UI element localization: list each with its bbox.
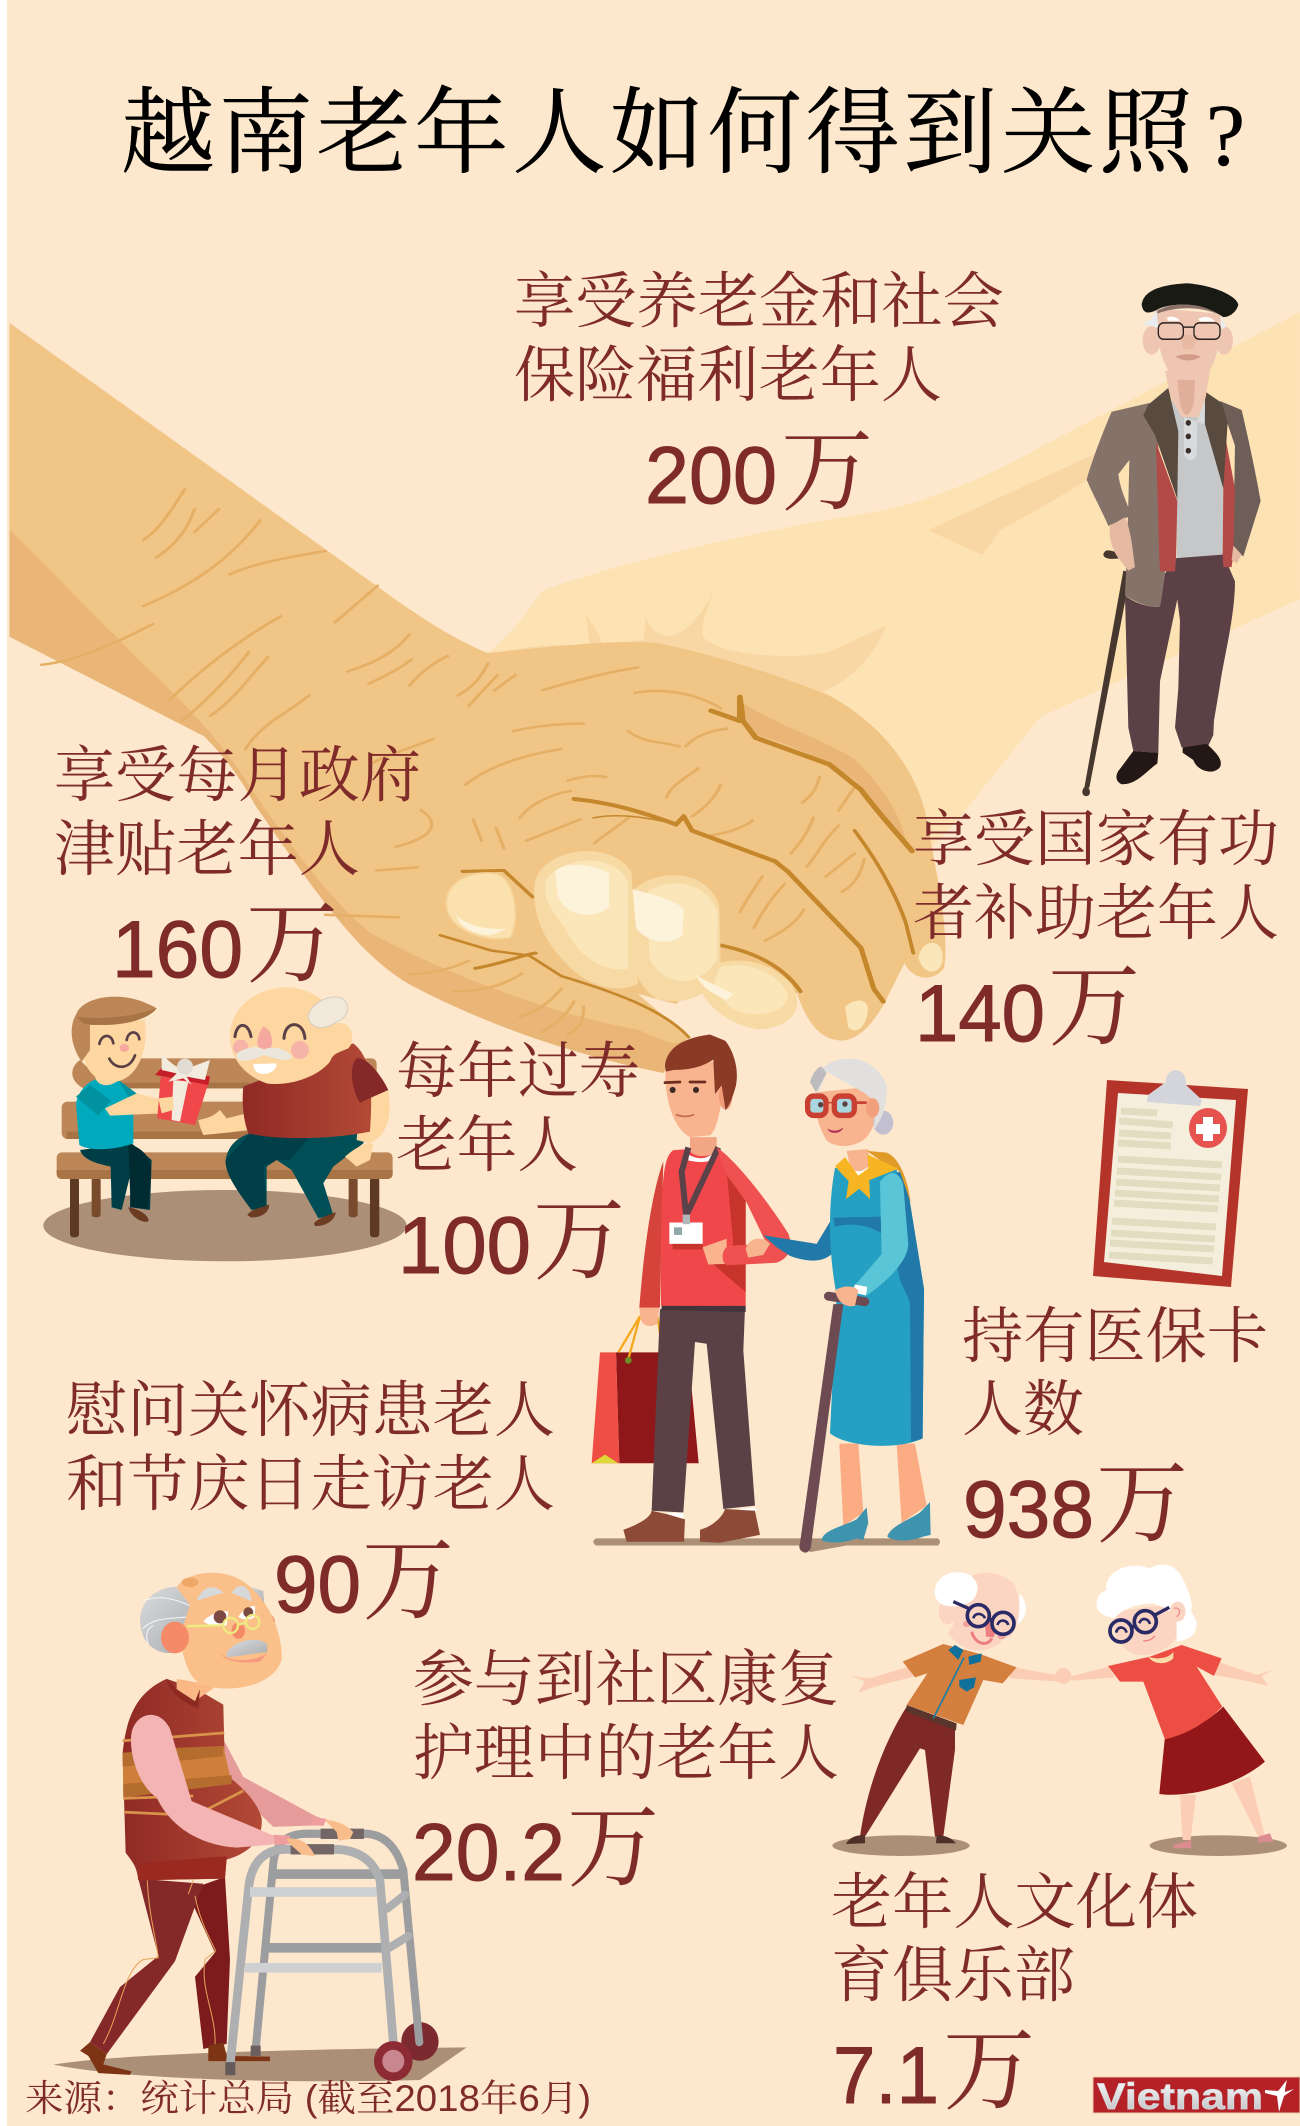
illustration: clasped hands [10,312,1300,1073]
text: community rehabilitation: 参与到社区康复 [413,1647,839,1714]
trousers [80,1877,270,2075]
pink far arm [223,1739,327,1827]
text: culture and sports clubs: 育俱乐部 [831,1943,1075,2010]
title: ? [1206,88,1249,185]
text: visits to sick elderly: 90 [274,1540,361,1630]
text: merit subsidy: 万 [1048,933,1140,1065]
hands on walker [287,1820,353,1856]
text: pension recipients [514,269,1004,530]
hands [1110,517,1242,571]
illustration: carer and elderly woman walking [592,1034,940,1553]
text: community rehabilitation: 万 [567,1774,659,1906]
eyes [203,1606,255,1626]
logo: Vietnam+ [1093,2076,1300,2117]
hair [1142,310,1227,330]
text: pension recipients: 享受养老金和社会 [514,269,1004,336]
clasped hands [1055,1668,1071,1684]
elderly woman [746,1059,931,1553]
moustache [220,1653,267,1662]
cap [1142,283,1238,317]
head [177,1573,282,1689]
shopping bag [592,1316,699,1463]
illustration: child giving gift to grandfather on bench [43,987,407,1261]
ground line [593,1538,940,1552]
text: culture and sports clubs: 老年人文化体 [831,1870,1198,1937]
hair [140,1587,200,1653]
title: 越南老年人如何得到关照 [121,57,1197,192]
collar and buttons [1172,397,1205,460]
text: health card holders: 万 [1096,1430,1188,1562]
text: longevity recipients: 100 [398,1201,531,1291]
grandfather [198,987,390,1226]
bench [57,1058,393,1237]
text: community rehabilitation: 20.2 [412,1808,565,1898]
cane [1082,550,1131,796]
shirt [1172,397,1223,558]
illustration: old man with walker [53,1573,467,2081]
child [72,997,173,1222]
text: merit subsidy: 者补助老年人 [913,881,1279,948]
text: health card holders [962,1304,1268,1562]
text: culture and sports clubs: 万 [943,1997,1035,2126]
jacket [1087,403,1165,607]
text: visits to sick elderly [66,1378,555,1639]
text: monthly allowance: 津贴老年人 [54,817,360,884]
older arm and hand [10,323,945,1073]
text: pension recipients: 万 [781,398,873,530]
ground shadows [832,1835,970,1856]
ground shadow [43,1190,407,1261]
text: visits to sick elderly: 和节庆日走访老人 [66,1452,555,1519]
text: merit subsidy: 享受国家有功 [913,807,1279,874]
shoes [1116,744,1221,784]
knuckle shading [740,701,906,841]
lapels [1143,388,1228,499]
illustration: elderly couple dancing [832,1565,1287,1856]
sweater stripes [123,1733,243,1814]
text: merit subsidy [913,807,1279,1065]
icon: medical clipboard [1093,1070,1248,1287]
trousers [1125,553,1235,753]
text: community rehabilitation: 护理中的老年人 [413,1721,839,1788]
text: visits to sick elderly: 慰问关怀病患老人 [66,1378,555,1445]
sweater vest [123,1679,262,1880]
glasses [1158,323,1220,339]
text: pension recipients: 200 [645,431,777,521]
text: longevity recipients [396,1039,640,1299]
old woman dancer [1070,1565,1273,1848]
neck [1165,371,1210,417]
back walker frame [251,1834,439,2061]
glasses [187,1615,259,1633]
head [1143,326,1161,355]
younger hand and arm [485,312,1300,860]
shading strip on younger arm [928,453,1097,555]
neck [177,1679,217,1701]
mouth [1175,354,1201,360]
front walker frame [225,1829,413,2081]
text: monthly allowance [54,743,421,1002]
source note: 来源：统计总局 (截至2018年6月) [25,2078,591,2119]
pink near arm [131,1715,277,1848]
carer [623,1034,791,1543]
fingers [446,851,943,1031]
text: visits to sick elderly: 万 [362,1507,454,1639]
text: monthly allowance: 160 [112,905,243,995]
skin wrinkles [41,489,864,1035]
text: health card holders: 人数 [962,1377,1084,1444]
text: health card holders: 938 [963,1465,1094,1555]
main creases [440,697,913,1037]
text: culture and sports clubs [831,1870,1198,2126]
text: merit subsidy: 140 [915,969,1045,1059]
darker underside of older arm [10,530,686,1073]
text: monthly allowance: 享受每月政府 [54,743,421,810]
text: pension recipients: 保险福利老年人 [514,343,942,410]
illustration: elderly man with cane [1082,283,1261,796]
text: health card holders: 持有医保卡 [962,1304,1268,1371]
shading on younger hand [485,578,887,693]
text: monthly allowance: 万 [246,870,338,1002]
ground shadow [53,2047,467,2081]
old man dancer [846,1572,1060,1844]
text: culture and sports clubs: 7.1 [833,2031,939,2121]
gift box [155,1053,210,1125]
logo: Vietnam+: Vietnam [1097,2076,1263,2117]
text: longevity recipients: 万 [533,1167,625,1299]
text: longevity recipients: 每年过寿 [396,1039,640,1106]
text: community rehabilitation [412,1647,839,1906]
scarf [1150,403,1235,571]
text: longevity recipients: 老年人 [396,1113,578,1180]
